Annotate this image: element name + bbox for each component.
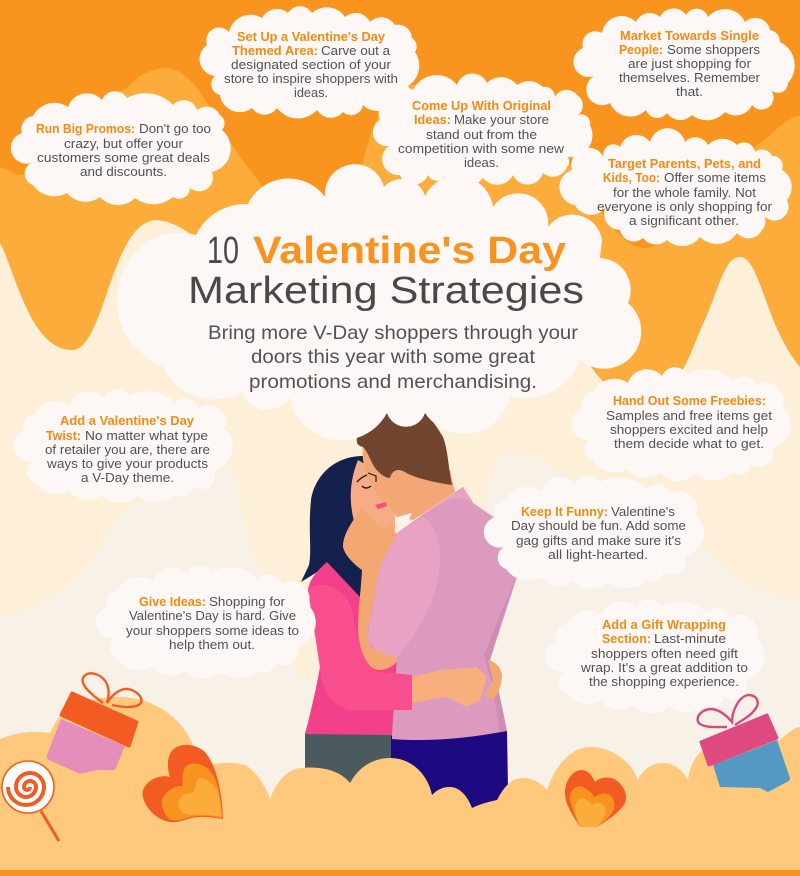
callout: Hand Out Some Freebies: Samples and free items get <box>606 408 772 423</box>
callout: Keep It Funny: Keep It Funny: <box>521 504 608 519</box>
inner heart <box>178 778 222 817</box>
subtitle: promotions and merchandising. <box>249 371 537 393</box>
callout: Add a Gift Wrapping Section: Section: <box>602 631 651 646</box>
callout: Give Ideas: Valentine's Day is hard. Give <box>129 608 296 623</box>
callout: Keep It Funny: Valentine's <box>611 504 676 519</box>
callout: Run Big Promos: Don't go too <box>139 121 211 136</box>
callout: Set Up a Valentine's Day Themed Area: designated section of your <box>231 57 392 72</box>
callout: Add a Valentine's Day Twist: Add a Valentine's Day <box>60 413 195 428</box>
cloud <box>96 565 316 679</box>
man's hair <box>357 411 452 485</box>
icon: left gift box <box>47 673 141 774</box>
man's eyelash <box>368 473 376 482</box>
callout: Add a Valentine's Day Twist: of retailer you are, there are <box>45 442 210 457</box>
callout: Come Up With Original Ideas: Make your store <box>454 112 549 127</box>
cloud <box>484 475 704 589</box>
bottom scalloped hills <box>0 697 800 876</box>
ribbon bow <box>698 695 758 727</box>
callout: Target Parents, Pets, and Kids, Too: everyone is only shopping for <box>597 199 773 214</box>
callout: Market Towards Single People: Market Towards Single <box>620 28 759 43</box>
woman's lips <box>375 502 387 509</box>
man's shirt <box>367 487 517 740</box>
callout: Hand Out Some Freebies: them decide what to get. <box>614 436 764 451</box>
background: pale hills <box>0 453 800 876</box>
callout: Market Towards Single People: are just shopping for <box>628 56 752 71</box>
outer heart <box>565 770 626 827</box>
callout: Set Up a Valentine's Day Themed Area: Set Up a Valentine's Day <box>237 29 386 44</box>
callout: Set Up a Valentine's Day Themed Area <box>200 6 419 118</box>
callout: Add a Gift Wrapping Section: wrap. It's a great addition to <box>580 660 748 675</box>
man's face and neck <box>363 440 455 520</box>
woman's hair <box>301 456 378 603</box>
callout: Add a Gift Wrapping Section <box>545 599 765 713</box>
woman's sleeve cuff <box>390 673 412 710</box>
callout: Add a Gift Wrapping Section: Last-minute <box>654 631 726 646</box>
man's shirt collar <box>418 487 473 517</box>
callout: Hand Out Some Freebies <box>571 367 791 481</box>
shirt shadow <box>484 577 517 732</box>
callout: Market Towards Single People: themselves. Remember <box>619 70 761 85</box>
icon: right gift box <box>698 695 790 792</box>
box lid <box>61 693 137 746</box>
inner heart <box>575 798 606 827</box>
callout: Hand Out Some Freebies: shoppers excited and help <box>610 422 768 437</box>
callout: Hand Out Some Freebies: Hand Out Some Freebies: <box>613 393 766 408</box>
cloud shape <box>117 164 641 440</box>
candy spiral <box>8 773 44 805</box>
callout: Give Ideas: help them out. <box>169 637 255 652</box>
title line 2: Marketing Strategies <box>188 270 584 312</box>
callout: Add a Valentine's Day Twist <box>13 389 233 503</box>
title line 1: Valentine's Day <box>253 230 566 272</box>
background: cream waves <box>0 220 800 876</box>
panel: title cloud <box>117 164 641 440</box>
cloud <box>545 599 765 713</box>
box body <box>47 719 125 774</box>
icon: right heart <box>565 770 626 827</box>
callout: Run Big Promos: and discounts. <box>80 164 167 179</box>
woman's arm and hand <box>343 508 400 670</box>
callout: Come Up With Original Ideas: Come Up With Original <box>412 98 551 113</box>
bottom orange bar <box>0 870 800 876</box>
callout: Market Towards Single People <box>573 8 795 120</box>
callout: Give Ideas: Give Ideas: <box>139 594 206 609</box>
cloud <box>571 367 791 481</box>
cloud <box>373 73 592 187</box>
callout: Come Up With Original Ideas: competition with some new <box>398 141 565 156</box>
illustration: kissing couple <box>301 411 517 815</box>
box lid <box>701 715 777 765</box>
callout: Set Up a Valentine's Day Themed Area: Carve out a <box>321 43 391 58</box>
background: amber waves <box>0 68 800 420</box>
callout: Add a Gift Wrapping Section: the shopping experience. <box>589 674 739 689</box>
callout: Keep It Funny <box>484 475 704 589</box>
callout: Add a Valentine's Day Twist: No matter what type <box>85 428 208 443</box>
callout: Target Parents, Pets, and Kids, Too <box>559 128 792 246</box>
callout: Come Up With Original Ideas: Ideas: <box>414 112 451 127</box>
callout: Market Towards Single People: Some shoppers <box>667 42 760 57</box>
callout: Market Towards Single People: People: <box>619 42 663 57</box>
callout: Market Towards Single People: that. <box>676 84 703 99</box>
callout: Run Big Promos: crazy, but offer your <box>64 136 184 151</box>
subtitle: doors this year with some great <box>251 346 536 368</box>
outer heart <box>143 745 223 822</box>
subtitle <box>208 322 579 393</box>
cloud <box>13 389 233 503</box>
callout: Target Parents, Pets, and Kids, Too: for the whole family. Not <box>613 185 756 200</box>
woman's pink sleeve <box>308 585 412 710</box>
middle heart <box>162 764 222 820</box>
callout: Set Up a Valentine's Day Themed Area: ideas. <box>294 85 328 100</box>
callout: Keep It Funny: gag gifts and make sure it's <box>516 533 682 548</box>
callout: Set Up a Valentine's Day Themed Area: Themed Area: <box>232 43 318 58</box>
callout: Run Big Promos: customers some great deals <box>37 150 211 165</box>
title line 1: 10 <box>207 230 239 272</box>
woman's trousers <box>305 733 395 810</box>
candy disc <box>2 761 54 813</box>
callout: Come Up With Original Ideas: ideas. <box>464 155 499 170</box>
callout: Target Parents, Pets, and Kids, Too: Offer some items <box>664 170 767 185</box>
callout: Keep It Funny: all light-hearted. <box>548 547 648 562</box>
middle heart <box>570 786 614 827</box>
cloud <box>11 91 231 205</box>
callout: Target Parents, Pets, and Kids, Too: Target Parents, Pets, and <box>608 156 761 171</box>
callout: Run Big Promos: Run Big Promos: <box>36 121 135 136</box>
callout: Add a Valentine's Day Twist: ways to give your products <box>46 456 209 471</box>
callout: Give Ideas <box>96 565 316 679</box>
callout: Run Big Promos <box>11 91 231 205</box>
callout: Come Up With Original Ideas: stand out from the <box>426 127 537 142</box>
stick <box>41 811 59 841</box>
callout: Set Up a Valentine's Day Themed Area: store to inspire shoppers with <box>224 71 398 86</box>
icon: lollipop <box>2 761 59 841</box>
woman's fingers on his back <box>485 660 502 700</box>
callout: Add a Valentine's Day Twist: a V-Day theme. <box>81 470 174 485</box>
man's shirt sleeve <box>367 517 440 657</box>
cloud <box>573 8 795 120</box>
woman's closed eye and brow <box>357 474 376 488</box>
box body <box>713 740 790 792</box>
callout: Target Parents, Pets, and Kids, Too: Kids, Too: <box>603 170 660 185</box>
woman's face <box>351 460 395 530</box>
man's jeans <box>391 730 508 815</box>
ribbon bow <box>83 673 141 707</box>
cloud <box>200 6 419 118</box>
callout: Come Up With Original Ideas <box>373 73 592 187</box>
woman's pink top <box>305 562 412 735</box>
woman's hand on his back <box>412 667 487 707</box>
icon: left heart <box>143 745 223 822</box>
callout: Keep It Funny: Day should be fun. Add some <box>511 518 686 533</box>
callout: Give Ideas: your shoppers some ideas to <box>126 623 299 638</box>
callout: Target Parents, Pets, and Kids, Too: a significant other. <box>629 213 739 228</box>
subtitle: Bring more V-Day shoppers through your <box>208 322 579 344</box>
callout: Give Ideas: Shopping for <box>209 594 286 609</box>
callout: Add a Gift Wrapping Section: shoppers often need gift <box>591 646 738 661</box>
callout: Add a Valentine's Day Twist: Twist: <box>46 428 81 443</box>
man's white collar inner <box>397 513 412 533</box>
callout: Add a Gift Wrapping Section: Add a Gift Wrapping <box>602 617 726 632</box>
cloud <box>559 128 792 246</box>
